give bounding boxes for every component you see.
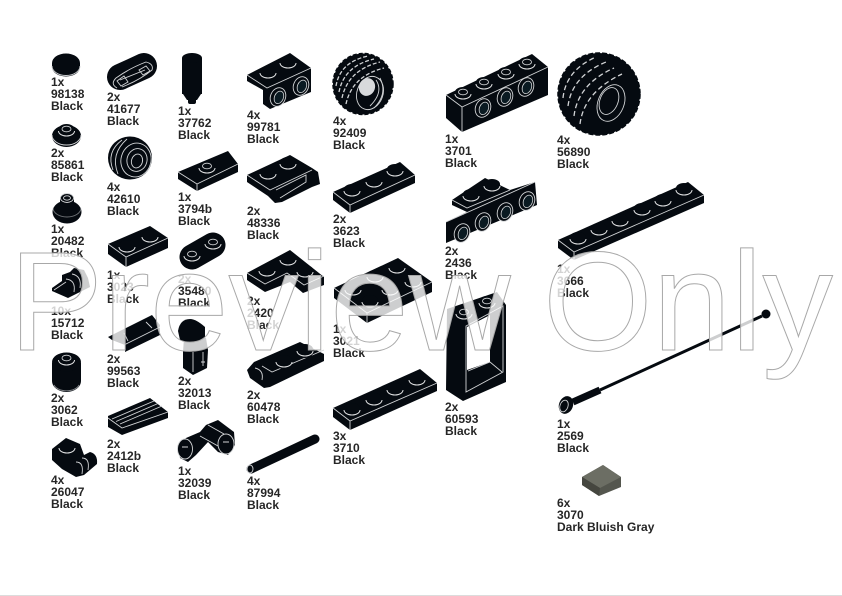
part 3794b: 1x [178,190,191,204]
part 99563 [107,315,160,390]
part 15712: 10x [51,304,71,318]
part 87994: 4x [247,474,260,488]
part 3666 [557,182,704,300]
part 2436: Black [445,268,477,282]
part 3710: 3710 [333,441,360,455]
part 32039 [178,420,235,502]
part 32013: Black [178,398,210,412]
part 3021 [333,258,432,360]
part 15712: Black [51,328,83,342]
part 85861: 2x [51,146,64,160]
part 3794b: 3794b [178,202,212,216]
parts column 3 [178,53,238,502]
part 3710: Black [333,453,365,467]
part 26047: 26047 [51,485,85,499]
part 3794b: Black [178,214,210,228]
part 2569: Black [557,441,589,455]
part 3021: 3021 [333,334,360,348]
part 98138: 1x [51,75,64,89]
part 99781 [247,53,312,146]
part 60478: 2x [247,388,260,402]
part 26047: 4x [51,473,64,487]
part 37762: 37762 [178,116,212,130]
part 56890: Black [557,157,589,171]
part 32039: 32039 [178,476,212,490]
part 99781: 4x [247,108,260,122]
part 3623 [333,162,415,250]
part 48336 [247,155,320,242]
part 2569 [556,310,770,455]
part 3062: Black [51,415,83,429]
parts column 1 [51,54,97,511]
part 92409: 92409 [333,126,367,140]
part 32013: 32013 [178,386,212,400]
part 32013: 2x [178,374,191,388]
part 48336: 48336 [247,216,281,230]
part 87994 [247,439,315,512]
part 2436: 2x [445,244,458,258]
part 87994: Black [247,498,279,512]
part 3023 [107,226,168,306]
part 60593: 60593 [445,412,479,426]
watermark: Preview [9,222,512,380]
part 2412b: 2412b [107,449,141,463]
part 60593: Black [445,424,477,438]
parts column 6 [445,54,548,438]
part 99563: 2x [107,352,120,366]
part 99781: 99781 [247,120,281,134]
part 41677: 2x [107,90,120,104]
part 2436: 2436 [445,256,472,270]
part 35480 [178,237,221,310]
part 3062: 2x [51,391,64,405]
part 2412b: Black [107,461,139,475]
part 42610: 42610 [107,192,141,206]
part 3023: Black [107,292,139,306]
part 3623: 3623 [333,224,360,238]
part 2412b [107,398,168,475]
part 3062 [51,352,83,429]
part 3070: 6x [557,496,570,510]
part 98138: Black [51,99,83,113]
parts column 4 [247,53,324,512]
part 32039: 1x [178,464,191,478]
part 3701: 3701 [445,144,472,158]
part 41677: Black [107,114,139,128]
part 32039: Black [178,488,210,502]
part 3794b [178,151,238,228]
part 41677: 41677 [107,102,141,116]
part 3666: Black [557,286,589,300]
part 85861: Black [51,170,83,184]
part 3070 [557,465,655,534]
part 15712 [51,268,90,342]
part 2420: 2x [247,294,260,308]
part 3710 [333,369,437,467]
part 60593: 2x [445,400,458,414]
part 3666: 1x [557,262,570,276]
part 2569: 1x [557,417,570,431]
part 37762: Black [178,128,210,142]
part 3023: 3023 [107,280,134,294]
part 48336: 2x [247,204,260,218]
part 56890: 4x [557,133,570,147]
part 35480: Black [178,296,210,310]
part 15712: 15712 [51,316,85,330]
parts column 7 [556,53,770,534]
part 35480: 2x [178,272,191,286]
part 2436 [445,178,538,282]
part 26047 [51,438,97,511]
part 99781: Black [247,132,279,146]
part 92409: 4x [333,114,346,128]
part 42610: Black [107,204,139,218]
part 60593 [445,292,506,438]
part 3023: 1x [107,268,120,282]
part 42610 [107,136,155,218]
watermark: Only [543,222,833,380]
part 3701: Black [445,156,477,170]
part 37762: 1x [178,104,191,118]
bottom edge line [0,595,842,596]
part 20482: 1x [51,222,64,236]
part 48336: Black [247,228,279,242]
part 20482 [51,194,85,260]
part 2569: 2569 [557,429,584,443]
part 42610: 4x [107,180,120,194]
parts column 5 [333,54,437,467]
part 3070: 3070 [557,508,584,522]
part 2420 [247,250,324,332]
part 60478 [247,342,324,426]
part 35480: 35480 [178,284,212,298]
part 99563: 99563 [107,364,141,378]
parts column 2 [107,62,168,475]
part 37762 [178,53,212,142]
part 85861: 85861 [51,158,85,172]
part 60478: 60478 [247,400,281,414]
part 41677 [107,62,152,128]
part 3021: Black [333,346,365,360]
part 87994: 87994 [247,486,281,500]
part 3062: 3062 [51,403,78,417]
part 3701: 1x [445,132,458,146]
part 56890 [557,53,640,171]
part 92409 [333,54,393,152]
part 60478: Black [247,412,279,426]
part 85861 [51,124,85,184]
part 3701 [445,54,548,170]
part 3666: 3666 [557,274,584,288]
part 92409: Black [333,138,365,152]
part 2420: Black [247,318,279,332]
part 99563: Black [107,376,139,390]
part 3021: 1x [333,322,346,336]
part 32013 [178,319,212,412]
part 56890: 56890 [557,145,591,159]
part 20482: Black [51,246,83,260]
part 2420: 2420 [247,306,274,320]
part 3710: 3x [333,429,346,443]
part 20482: 20482 [51,234,85,248]
part 3623: Black [333,236,365,250]
part 26047: Black [51,497,83,511]
part 98138: 98138 [51,87,85,101]
part 3070: Dark Bluish Gray [557,520,655,534]
part 3623: 2x [333,212,346,226]
part 98138 [51,54,85,113]
part 2412b: 2x [107,437,120,451]
